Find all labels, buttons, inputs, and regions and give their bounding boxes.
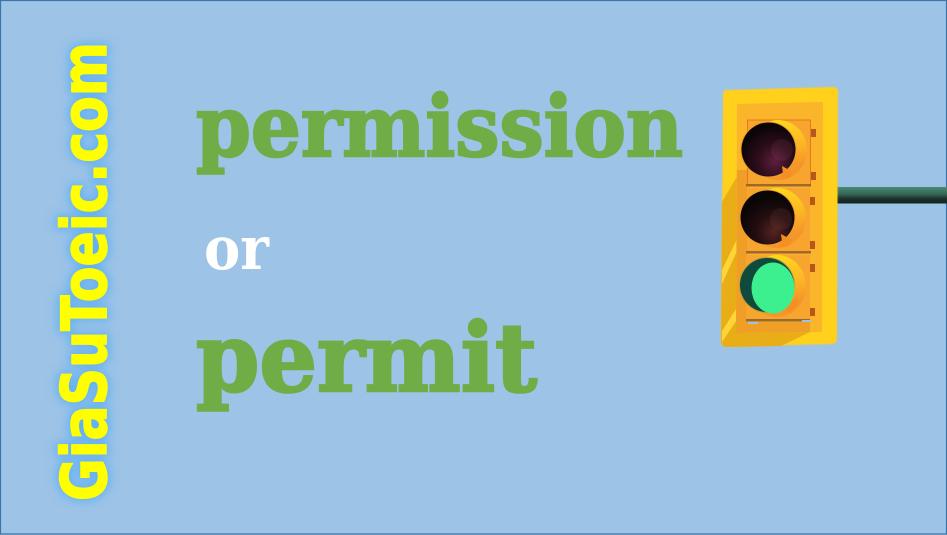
- pole arm: [837, 187, 947, 204]
- backplate shadow: [721, 168, 810, 347]
- bottom signal head, green lit: [739, 255, 811, 324]
- top signal head: [740, 120, 811, 186]
- signal body: [736, 102, 823, 333]
- icon: traffic light: [721, 87, 947, 347]
- word: permit: permit: [196, 303, 537, 414]
- middle signal head: [740, 188, 811, 254]
- housing backplate: [721, 87, 838, 347]
- green lamp: [752, 262, 794, 314]
- mounting bolts: [810, 129, 816, 316]
- word: permission: permission: [196, 77, 683, 176]
- word: or: or: [204, 214, 270, 284]
